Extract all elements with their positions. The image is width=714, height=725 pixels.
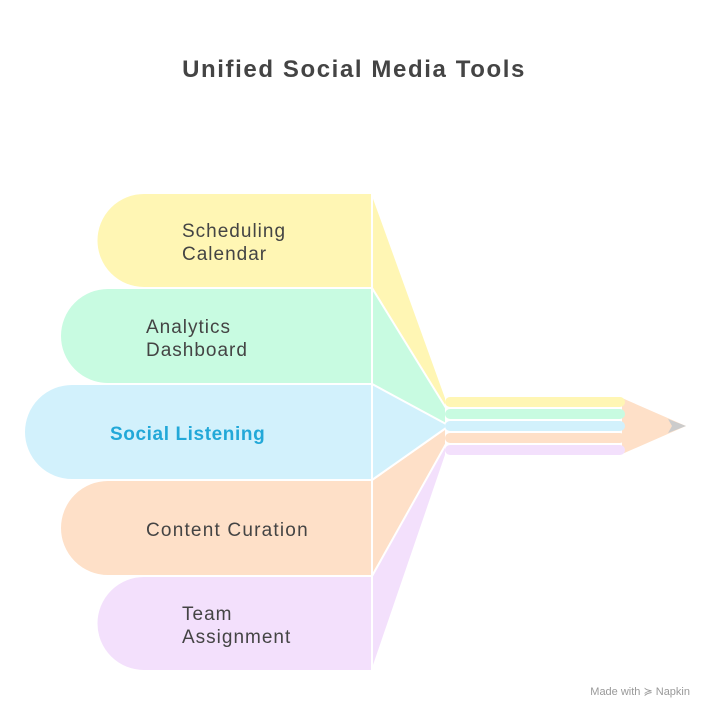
panel: Analytics Dashboard: Analytics [146, 317, 231, 338]
panel: Content Curation: Content Curation [146, 520, 309, 541]
panel: Team Assignment [96, 576, 372, 671]
connector: blue [372, 384, 446, 480]
connector: purple [372, 440, 446, 671]
icon: pencil [445, 397, 686, 455]
panel: Analytics Dashboard [60, 288, 372, 384]
footer: made with napkin: Made with ≽ Napkin [590, 686, 690, 698]
panel: Scheduling Calendar: Scheduling [182, 221, 286, 242]
connector: green [372, 288, 446, 425]
panel: Social Listening: Social Listening [110, 424, 265, 445]
title: Unified Social Media Tools [182, 56, 526, 83]
connector: orange [372, 428, 446, 576]
panel: Scheduling Calendar: Calendar [182, 244, 267, 265]
panel: Team Assignment: Team [182, 604, 232, 625]
panel: Analytics Dashboard: Dashboard [146, 340, 248, 361]
panel: Scheduling Calendar [96, 193, 372, 288]
connector: yellow [372, 193, 446, 410]
panel: Team Assignment: Assignment [182, 627, 291, 648]
panel: Content Curation [60, 480, 372, 576]
panel: Social Listening [24, 384, 372, 480]
